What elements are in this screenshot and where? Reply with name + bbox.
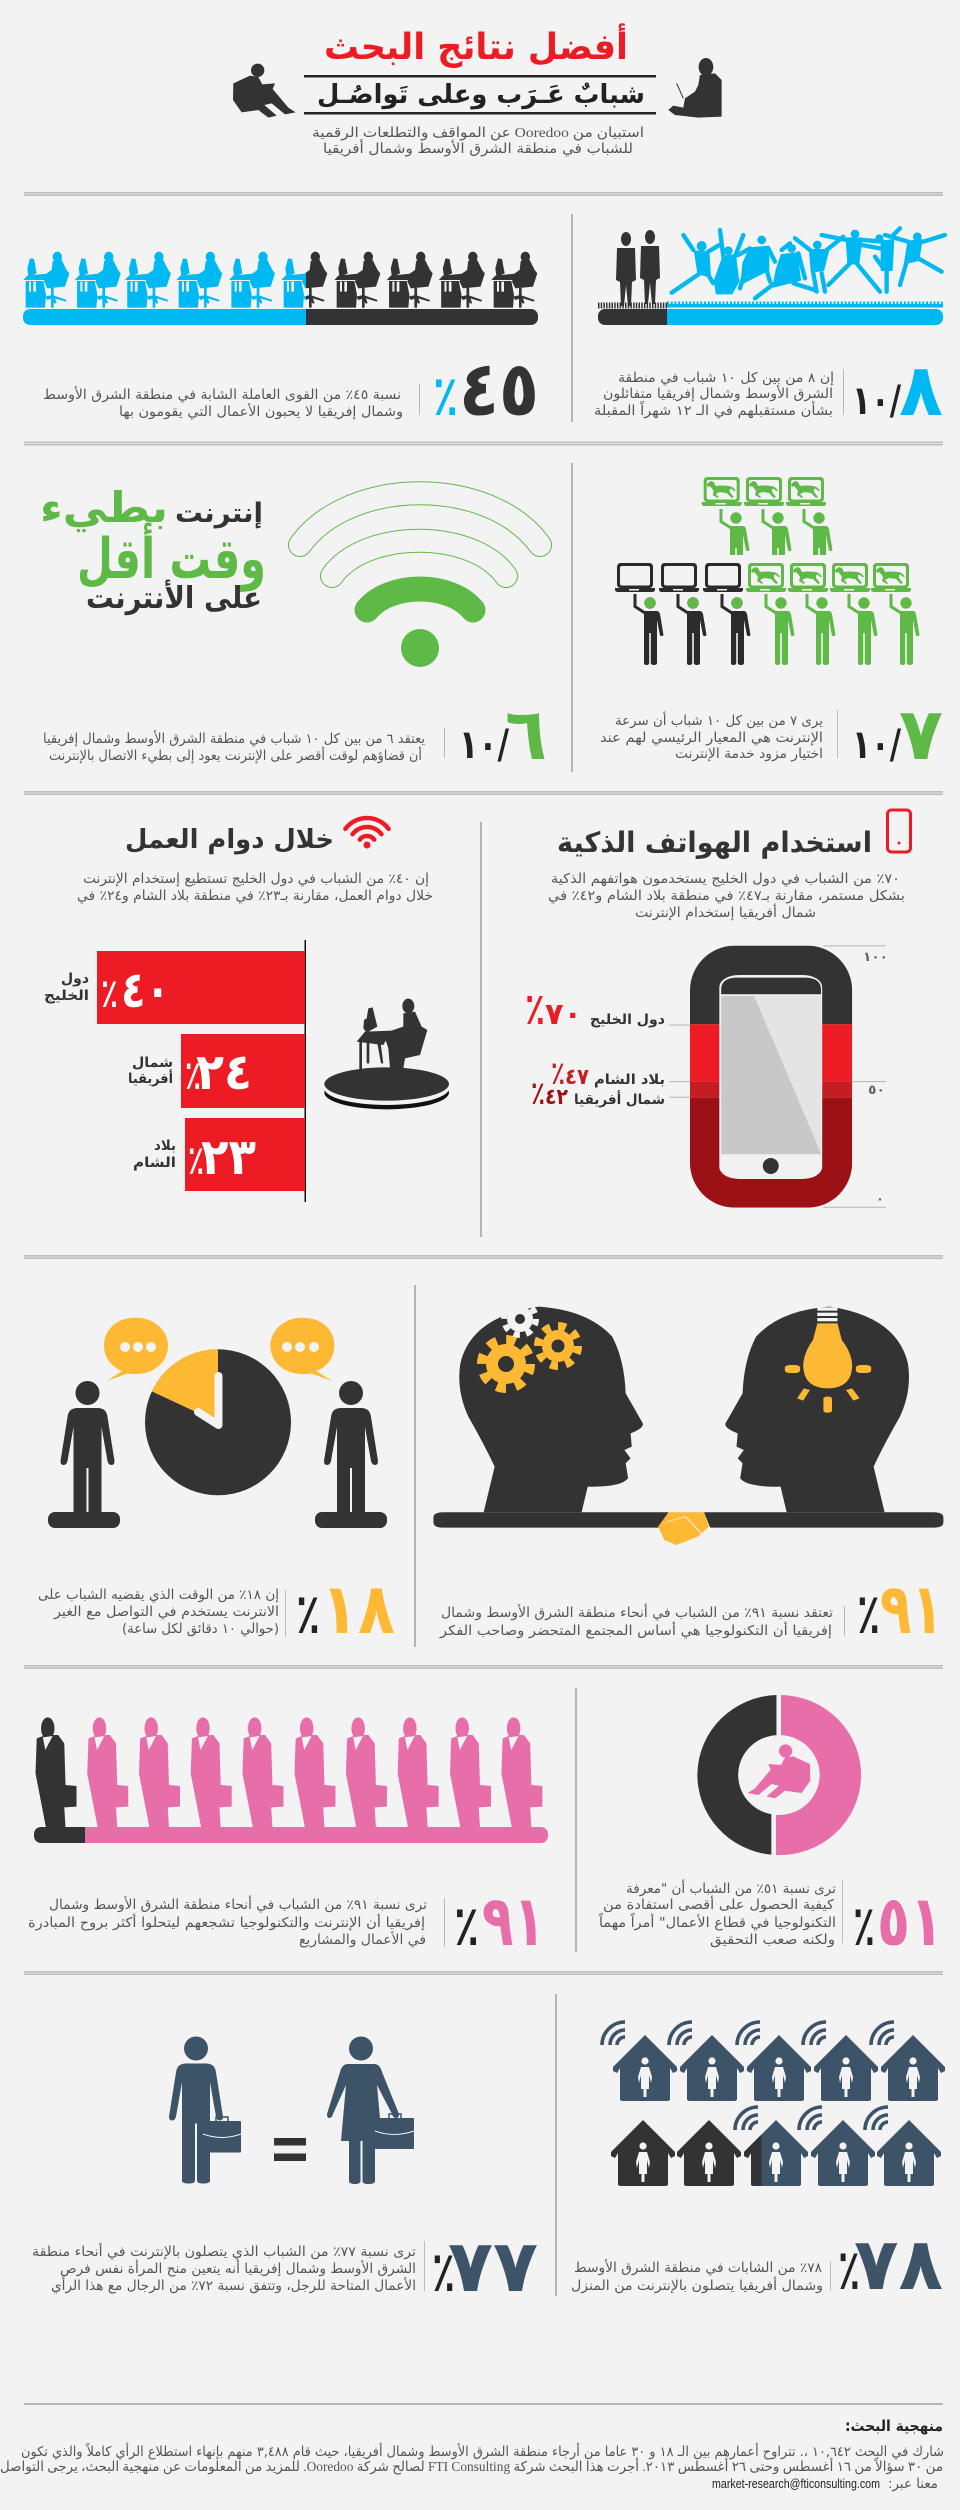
methodology text [0,2442,944,2492]
panel: 7 of 10 internet speed [600,477,943,776]
number: 8/10: ٨ [899,348,943,432]
bar: Gulf 40%: ٪ [101,971,118,1017]
icon: two people and clock [48,1318,387,1528]
bar: Gulf 40%: الخليج [44,988,89,1004]
panel: 91 percent entrepreneurship [28,1717,548,1962]
label: North Africa 42%: شمال أفريقيا [574,1090,665,1108]
text: يرى ٧ من بين كل ١٠ شباب أن سرعة [615,711,823,729]
methodology text: من ٣٠ سؤالاً من ١٦ أغسطس وحتى ٢٦ أغسطس ٢٠١٣. أجرت هذا البحث شركة FTI Consulting لصالح شركة Ooredoo. للمزيد من المعلومات عن منهجية البحث، يرجى التواصل [0,2457,943,2475]
text: ترى نسبة ٧٧٪ من الشباب الذي يتصلون بالإنترنت في أنحاء منطقة [32,2242,416,2260]
heading: خلال دوام العمل [125,825,334,855]
panel: 18 percent time online [38,1318,395,1650]
axis [304,940,306,1202]
chart: phone fill levels: ٠ [876,1192,884,1207]
icon: houses with wifi [602,2022,945,2186]
bar: Gulf 40%: دول [61,971,89,987]
callout: slow internet less time: إنترنت [175,498,263,529]
intro text [312,126,644,157]
panel: during working hours [44,818,449,1202]
methodology text: معنا عبر: [888,2476,938,2492]
label: Levant 47%: ٤٧ [565,1065,590,1090]
panel: 91 percent technology [433,1303,943,1650]
text: اختيار مزود خدمة الإنترنت [675,746,823,762]
icon: gears [482,1303,578,1388]
icon: people holding laptops [615,477,920,665]
number: 91%: ٪ [454,1894,479,1959]
number: 51%: ٥١ [877,1880,943,1962]
text: ترى نسبة ٥١٪ من الشباب أن "معرفة [626,1879,836,1897]
text [77,871,433,904]
icon: reading student [233,64,296,118]
panel: methodology [0,2417,944,2492]
grass and progress bar [598,303,943,325]
text [600,711,823,762]
label: North Africa 42% [531,1074,665,1112]
bar: Levant 23%: ٢٣ [201,1128,256,1186]
icon: woman with briefcase [327,2036,414,2184]
text [598,1879,836,1948]
label: Gulf 70%: ٧٠ [545,997,582,1032]
icon: handshake [658,1512,709,1545]
text: تعتقد نسبة ٩١٪ من الشباب في أنحاء منطقة الشرق الأوسط وشمال [441,1603,833,1621]
number: 51%: ٪ [853,1894,875,1959]
text: الإنترنت هي المعيار الرئيسي لهم عند [600,730,823,746]
panel: 8 of 10 optimistic [594,228,945,432]
text [43,386,403,420]
intro text: للشباب في منطقة الشرق الأوسط وشمال أفريقيا [323,139,633,157]
text [439,1603,833,1639]
icon: red phone [888,810,910,852]
text: إفريقيا أن الإنترنت والتكنولوجيا تشجعهم ليتحلوا أكثر بروح المبادرة [28,1913,425,1931]
text: يعتقد ٦ من بين كل ١٠ شباب في منطقة الشرق الأوسط وشمال إفريقيا [43,730,425,747]
label: Levant 47%: بلاد الشام [594,1072,665,1088]
text: بشأن مستقبلهم في الـ ١٢ شهراً المقبلة [594,400,833,419]
callout: slow internet less time: وقت أقل [77,522,266,592]
text [548,871,905,921]
text: نسبة ٤٥٪ من القوى العاملة الشابة في منطقة الشرق الأوسط [43,386,401,403]
number: 78%: ٧٨ [854,2222,943,2306]
icon: jumping people [616,228,945,306]
icon: office workers row [23,252,537,308]
bar: North Africa 24%: شمال [132,1055,173,1071]
title: أفضل نتائج البحث [324,23,628,68]
text [28,1895,427,1948]
number: 78%: ٪ [838,2238,860,2303]
panel: 77 percent equal opportunity [32,2036,538,2308]
number: 45% [419,344,539,433]
number: 91% [844,1568,943,1650]
intro text: استبيان من Ooredoo عن المواقف والتطلعات الرقمية [312,126,644,141]
icon: red wifi [345,818,389,848]
text: وشمال إفريقيا لا يحبون الأعمال التي يقومون بها [119,403,403,420]
callout: slow internet less time: على الأنترنت [86,579,262,616]
heading: استخدام الهواتف الذكية [557,826,872,859]
bar: Levant 23%: الشام [133,1155,176,1171]
text: أن قضاؤهم لوقت أقصر على الإنترنت يعود إلى بطيء الاتصال بالإنترنت [49,746,422,764]
number: 18%: ١٨ [321,1568,395,1650]
chart: phone fill levels: ٥٠ [868,1083,885,1098]
panel: 51 percent business [598,1695,943,1962]
text: ولكنه صعب التحقيق [710,1932,835,1948]
number: 91% [444,1880,545,1962]
chart: donut 51 percent [697,1695,861,1855]
chart: phone fill levels [669,946,888,1208]
callout: slow internet less time: بطيء [40,483,168,533]
bar: North Africa 24%: أفريقيا [128,1069,173,1087]
callout: slow internet less time [40,483,266,616]
text: الشرق الأوسط وشمال إفريقيا أنه يتعين منح المرأة نفس فرص [60,2259,416,2277]
icon: clock [145,1349,291,1495]
label: Gulf 70%: ٪ [525,984,545,1035]
icon: woman with laptop [668,58,722,118]
text [38,1587,279,1637]
bar: North Africa 24% [128,1034,305,1108]
methodology text: market-research@fticonsulting.com [712,2476,880,2491]
bar: North Africa 24%: ٢٤ [196,1043,252,1101]
bar: Levant 23%: بلاد [154,1138,176,1154]
icon: right person [315,1381,387,1528]
number: 18%: ٪ [296,1582,320,1647]
number: 6/10 [444,692,547,776]
icon: seated reader [748,1744,810,1798]
label: Levant 47% [551,1054,665,1092]
number: 45%: ٤٥ [459,344,539,433]
number: 77%: ٪ [432,2240,455,2305]
text: وشمال أفريقيا يتصلون بالإنترنت من المنزل [571,2276,823,2294]
text: بشكل مستمر، مقارنة بـ٤٧٪ في منطقة بلاد الشام و٤٢٪ في [548,888,905,904]
number: 6/10: ٦ [505,692,547,776]
text [43,730,425,764]
text: الأعمال المتاحة للرجل، وتتفق نسبة ٧٢٪ من الرجال مع هذا الرأي [51,2276,416,2294]
number: 7/10: ٧ [899,692,943,776]
icon: left person [48,1381,120,1528]
number: 8/10 [843,348,943,432]
label: Gulf 70% [525,984,665,1035]
panel: smartphone use [525,810,910,1208]
text: الانترنت يستخدم في التواصل مع الغير [53,1604,279,1620]
heading: منهجية البحث: [845,2417,943,2435]
icon: equals sign [274,2138,306,2161]
text: (حوالي ١٠ دقائق لكل ساعة) [122,1621,279,1637]
label: North Africa 42%: ٤٢ [545,1085,568,1110]
text: ٧٠٪ من الشباب في دول الخليج يستخدمون هواتفهم الذكية [551,871,900,887]
label: Levant 47%: ٪ [551,1054,565,1092]
text: إن ١٨٪ من الوقت الذي يقضيه الشباب على [38,1587,279,1603]
text: التكنولوجيا في قطاع الأعمال" أمراً مهماً [598,1912,836,1931]
number: 45%: ٪ [433,364,458,429]
bar: Levant 23% [133,1118,305,1191]
header [233,23,722,157]
text: إن ٨ من بين كل ١٠ شباب في منطقة [618,370,834,386]
text: كيفية الحصول على أقصى استفادة من [603,1895,835,1913]
text [32,2242,416,2294]
icon: speech bubbles [104,1318,334,1381]
icon: business men row [36,1717,542,1827]
number: 91%: ٩١ [482,1880,545,1962]
bar: Gulf 40% [44,951,305,1024]
panel: 45 percent dislike jobs [23,252,539,433]
icon: light bulb [785,1307,871,1413]
text: الشرق الأوسط وشمال إفريقيا متفائلون [603,385,833,402]
bar: Gulf 40%: ٤٠ [121,961,170,1019]
text: في الأعمال والمشاريع [299,1931,426,1948]
number: 77%: ٧٧ [448,2224,538,2308]
icon: two heads with gears and bulb [433,1303,943,1545]
bar: North Africa 24%: ٪ [185,1053,201,1099]
text: إفريقيا أن التكنولوجيا هي أساس المجتمع المتحضر وصاحب الفكر [439,1621,832,1639]
icon: large wifi [300,493,540,667]
label: Gulf 70%: دول الخليج [590,1012,665,1028]
text [594,370,834,419]
progress bar [23,309,538,325]
subtitle with rules: شبابٌ عَـرَب وعلى تَواصُـل [317,80,645,110]
panel: 6 of 10 slow internet [40,483,547,776]
methodology text: شارك في البحث ١٠,٦٤٢ ،. تتراوح أعمارهم بين الـ ١٨ و ٣٠ عاما من أرجاء منطقة الشرق الأوسط وشمال أفريقيا، حيث قام ٣,٤٨٨ منهم بإنهاء استطلاع الرأي كاملاً والذي تكون [21,2442,944,2460]
number: 7/10 [837,692,943,776]
number: 18% [285,1568,395,1650]
number: 7/10: ١٠/ [852,722,901,768]
text: شمال أفريقيا إستخدام الإنترنت [635,903,816,921]
number: 8/10: ١٠/ [852,378,901,424]
text: خلال دوام العمل، مقارنة بـ٢٣٪ في منطقة بلاد الشام و٢٤٪ في [77,888,433,904]
text: ترى نسبة ٩١٪ من الشباب في أنحاء منطقة الشرق الأوسط وشمال [49,1895,427,1913]
progress bar [34,1827,548,1843]
icon: worker at desk on disc [324,999,449,1109]
label: North Africa 42%: ٪ [531,1074,545,1112]
icon: man with briefcase [169,2036,241,2184]
number: 6/10: ١٠/ [459,722,509,768]
text: ٧٨٪ من الشابات في منطقة الشرق الأوسط [574,2259,822,2276]
bar: Levant 23%: ٪ [188,1138,204,1184]
chart: phone fill levels: ١٠٠ [863,950,888,965]
text [571,2259,823,2294]
number: 91%: ٪ [857,1582,880,1647]
number: 51% [842,1880,943,1962]
text: إن ٤٠٪ من الشباب في دول الخليج تستطيع إستخدام الإنترنت [83,871,429,887]
panel: 78 percent women home internet [571,2022,945,2306]
